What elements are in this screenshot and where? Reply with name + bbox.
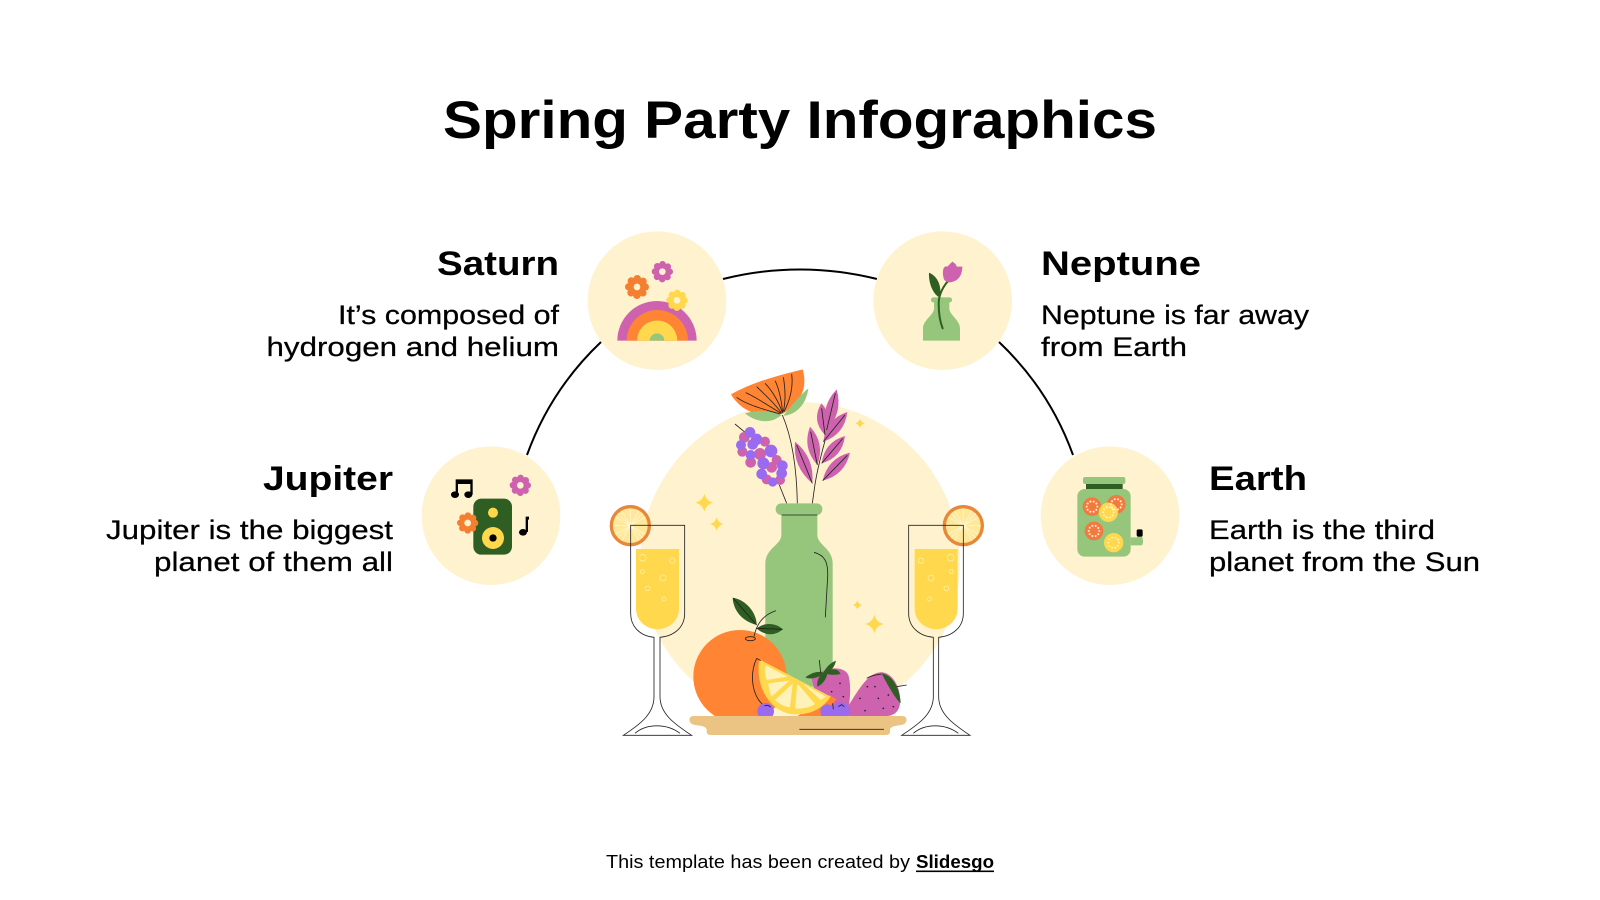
panel: Neptune text: from Earth [1041,332,1187,362]
background circle [640,402,960,722]
panel: Earth text [1209,460,1480,577]
left glass [611,507,692,735]
sparkles [695,419,884,633]
panel: Neptune text: Neptune is far away [1041,300,1310,330]
panel: Saturn text: Saturn [437,245,559,283]
panel: Saturn text [266,245,560,362]
pink leaf branch [795,389,850,483]
orange fruit [693,598,787,723]
bouquet stems [735,407,835,503]
panel: Saturn text: It’s composed of [338,300,560,330]
panel: Earth text: planet from the Sun [1209,547,1480,577]
title: Spring Party Infographics [443,91,1157,150]
icon: Jupiter speaker and notes [422,446,560,585]
panel: Earth text: Earth is the third [1209,515,1435,545]
orange flower [731,369,808,421]
panel: Neptune text [1041,245,1310,362]
icon: Neptune tulip vase [873,231,1012,370]
icon: Earth drink dispenser [1041,446,1179,585]
lavender sprig [736,427,788,487]
panel: Jupiter text [106,460,394,577]
icon: Saturn rainbow and flowers [588,231,726,370]
panel: Saturn text: hydrogen and helium [266,332,559,362]
blueberries [757,702,850,720]
lemon wedge [752,658,837,717]
green bottle [765,503,833,687]
panel: Jupiter text: planet of them all [154,547,393,577]
panel: Jupiter text: Jupiter is the biggest [106,515,394,545]
connecting arc [527,269,1073,455]
panel: Neptune text: Neptune [1041,245,1201,283]
central illustration: bottle, glasses and fruit [611,369,982,735]
right glass [902,507,982,735]
footer credit: This template has been created by [606,852,910,872]
panel: Jupiter text: Jupiter [263,460,393,498]
panel: Earth text: Earth [1209,460,1307,498]
footer credit: Slidesgo [916,852,994,872]
strawberries [805,660,907,716]
plate [689,716,907,735]
